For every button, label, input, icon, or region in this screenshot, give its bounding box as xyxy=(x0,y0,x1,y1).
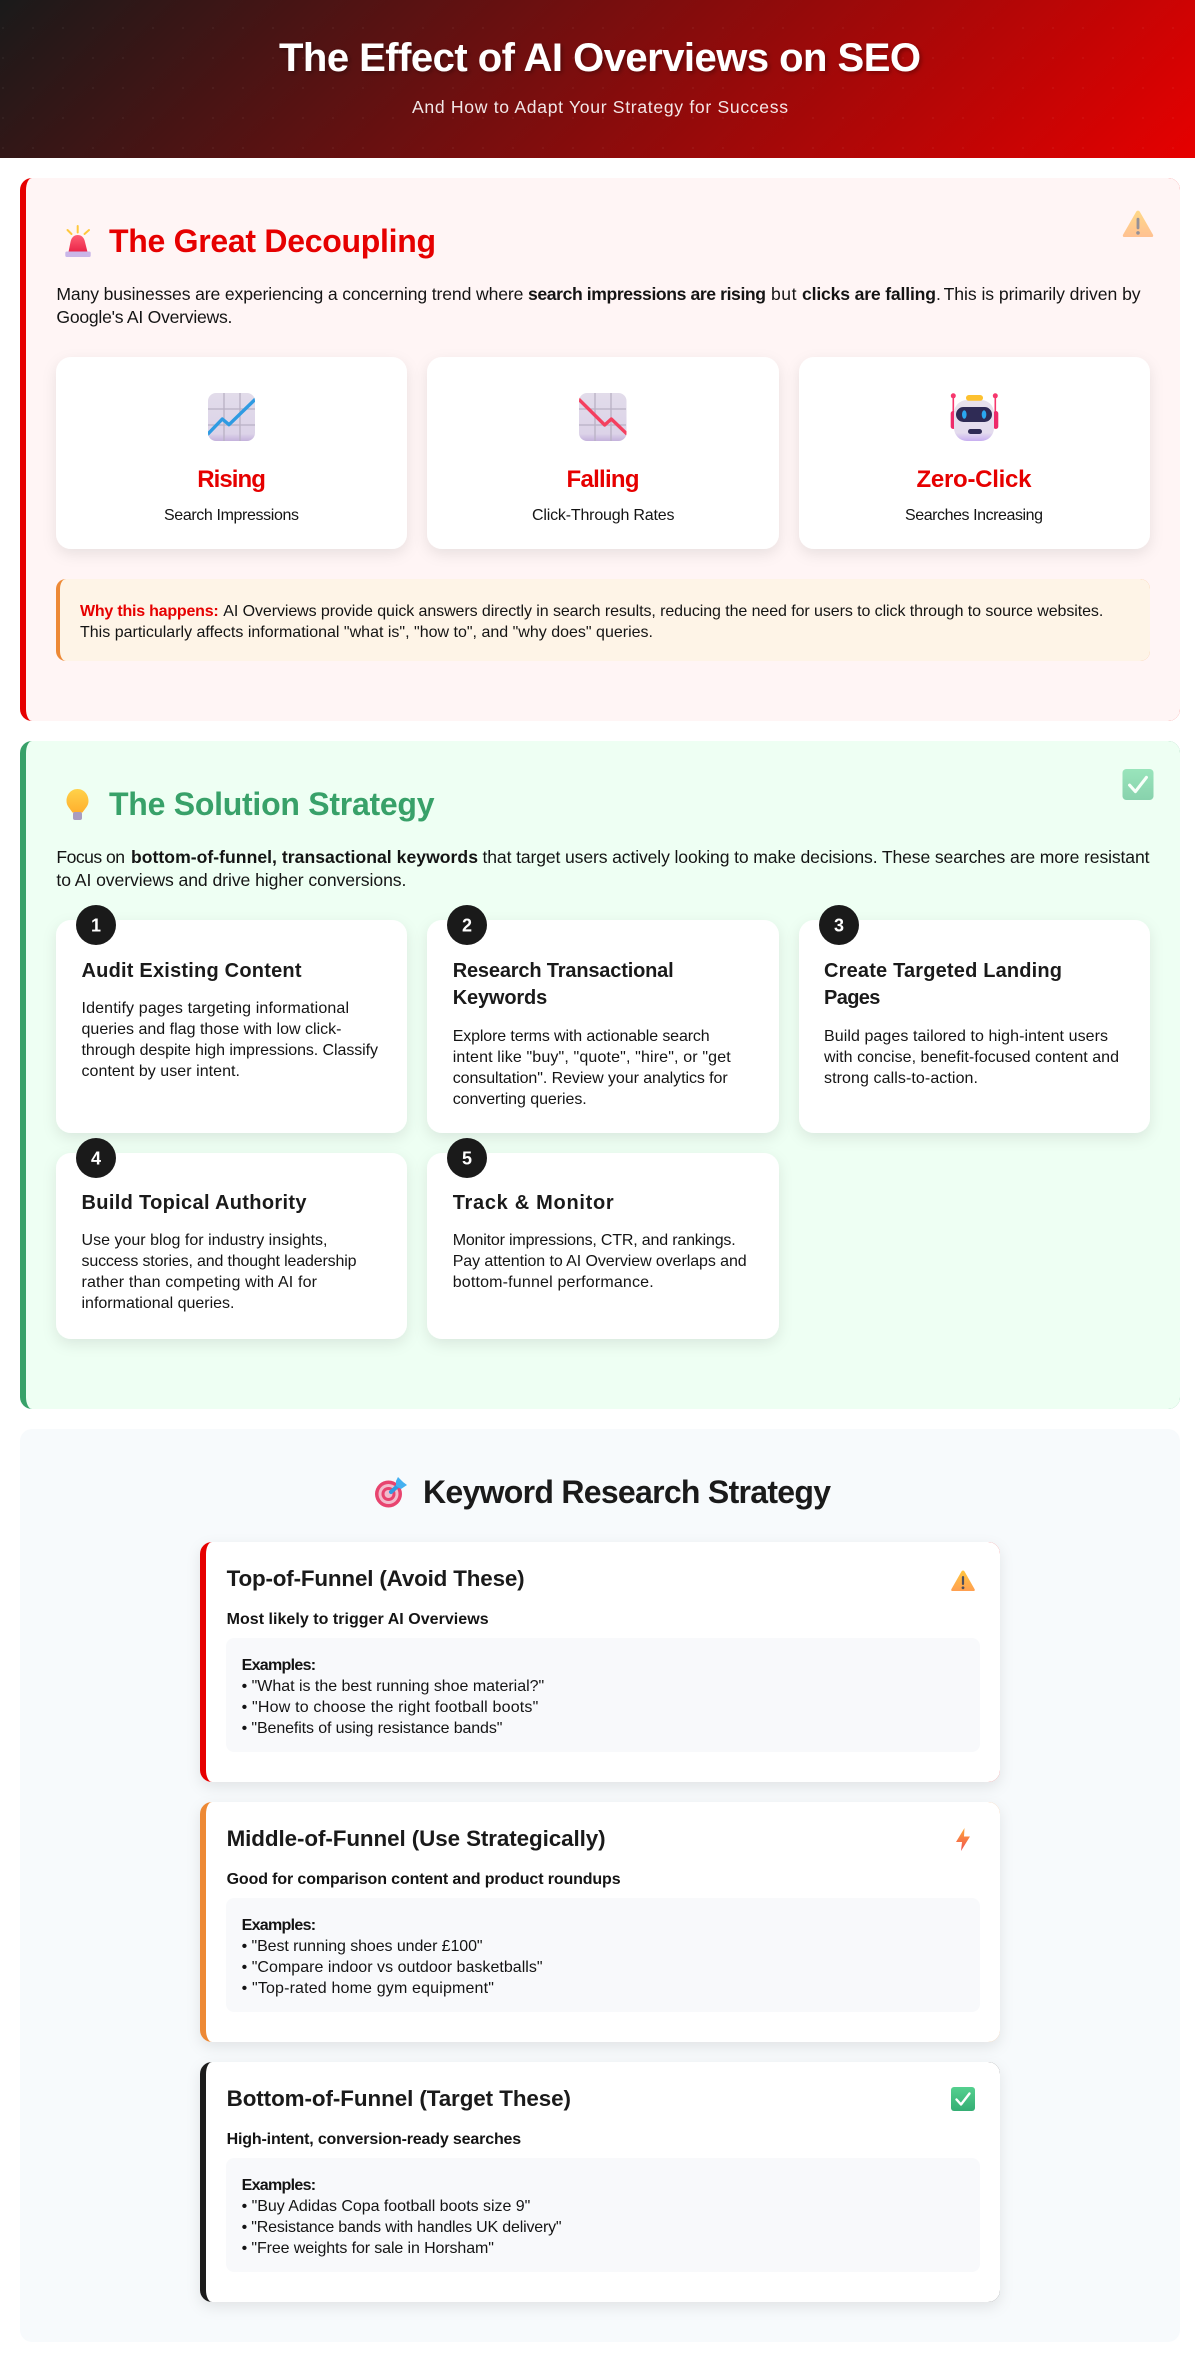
stat label: Search Impressions xyxy=(164,507,299,524)
examples box: • "What is the best running shoe material?" xyxy=(242,1678,544,1695)
step card 2: converting queries. xyxy=(453,1091,587,1108)
intro text: This is primarily driven by xyxy=(944,284,1141,304)
icon: check mark xyxy=(951,2087,975,2111)
subtitle: And How to Adapt Your Strategy for Success xyxy=(412,97,788,117)
step card 3: Pages xyxy=(824,987,880,1009)
funnel card: bottom: Bottom-of-Funnel (Target These) xyxy=(227,2086,571,2111)
intro text: but xyxy=(771,284,797,304)
step card 1: Audit Existing Content xyxy=(82,960,302,982)
panel: the great decoupling xyxy=(20,178,1180,721)
examples box: • "Free weights for sale in Horsham" xyxy=(242,2240,494,2257)
step card 3: Create Targeted Landing xyxy=(824,960,1062,982)
funnel card: bottom: High-intent, conversion-ready searches xyxy=(227,2131,521,2148)
step card 5: Pay attention to AI Overview overlaps and xyxy=(453,1253,747,1270)
stat card: falling xyxy=(427,357,779,549)
examples box: • "Compare indoor vs outdoor basketballs" xyxy=(242,1959,543,1976)
examples box: Examples: xyxy=(242,1917,316,1934)
examples box: • "Best running shoes under £100" xyxy=(242,1938,483,1955)
callout: why this happens: This particularly affects informational "what is", "how to", and "why does" queries. xyxy=(80,624,653,641)
intro text: Focus on xyxy=(56,847,125,867)
stat label: Click-Through Rates xyxy=(532,507,674,524)
step card 2: Research Transactional xyxy=(453,960,674,982)
intro text xyxy=(56,847,1150,890)
examples box xyxy=(226,1898,980,2012)
step card 1: 1 xyxy=(91,916,101,936)
step card 1: Identify pages targeting informational xyxy=(82,1000,349,1017)
stat value: Falling xyxy=(566,466,640,493)
icon: chart falling xyxy=(578,393,628,441)
step card 1: queries and flag those with low click- xyxy=(82,1021,342,1038)
stat card: zero-click xyxy=(799,357,1150,549)
stat card: rising xyxy=(56,357,407,549)
step card 3 xyxy=(799,905,1150,1133)
stat value: Rising xyxy=(197,466,266,493)
intro text: to AI overviews and drive higher conversions. xyxy=(56,870,406,890)
step card 1: through despite high impressions. Classify xyxy=(82,1042,378,1059)
examples box: • "Benefits of using resistance bands" xyxy=(242,1720,502,1737)
intro text: Many businesses are experiencing a concerning trend where xyxy=(56,284,523,304)
examples box: Examples: xyxy=(242,2177,316,2194)
header banner xyxy=(0,0,1195,158)
funnel card: top: Most likely to trigger AI Overviews xyxy=(227,1611,489,1628)
icon: chart rising xyxy=(207,393,256,441)
step card 3: 3 xyxy=(834,916,844,936)
step card 4: Use your blog for industry insights, xyxy=(82,1232,328,1249)
icon: target xyxy=(375,1477,407,1508)
step card 1: content by user intent. xyxy=(82,1063,240,1080)
icon: check watermark xyxy=(1122,769,1154,800)
examples box: • "Top-rated home gym equipment" xyxy=(242,1980,494,1997)
panel: the solution strategy xyxy=(20,741,1180,1409)
funnel card: middle: Good for comparison content and product roundups xyxy=(227,1871,621,1888)
examples box: • "Buy Adidas Copa football boots size 9" xyxy=(242,2198,530,2215)
icon: robot xyxy=(951,393,998,441)
intro text xyxy=(56,284,1141,327)
title: The Effect of AI Overviews on SEO xyxy=(279,36,921,80)
icon: warning xyxy=(951,1570,975,1591)
step card 4: 4 xyxy=(91,1148,101,1168)
intro text: bottom-of-funnel, transactional keywords xyxy=(131,847,478,867)
step card 2: 2 xyxy=(462,916,472,936)
step card 1 xyxy=(56,905,407,1133)
heading: Keyword Research Strategy xyxy=(423,1474,831,1510)
funnel card: middle: Middle-of-Funnel (Use Strategically) xyxy=(227,1826,606,1851)
step card 4 xyxy=(56,1138,407,1339)
step card 3: with concise, benefit-focused content and xyxy=(823,1049,1119,1066)
icon: siren xyxy=(65,226,91,257)
step card 3: strong calls-to-action. xyxy=(824,1070,978,1087)
step card 5: Monitor impressions, CTR, and rankings. xyxy=(453,1232,736,1249)
step card 3: Build pages tailored to high-intent users xyxy=(824,1028,1108,1045)
stat value: Zero-Click xyxy=(916,466,1032,493)
examples box: Examples: xyxy=(242,1657,316,1674)
icon: lightning bolt xyxy=(956,1828,970,1851)
step card 5: bottom-funnel performance. xyxy=(453,1274,654,1291)
step card 2: Explore terms with actionable search xyxy=(453,1028,710,1045)
step card 5: 5 xyxy=(462,1148,472,1168)
step card 5: Track & Monitor xyxy=(453,1192,614,1214)
examples box: • "How to choose the right football boots" xyxy=(242,1699,538,1716)
heading: The Great Decoupling xyxy=(109,223,436,259)
examples box xyxy=(226,2158,980,2272)
funnel card: top xyxy=(200,1542,1000,1782)
intro text: Google's AI Overviews. xyxy=(56,307,232,327)
funnel card: middle xyxy=(200,1802,1000,2042)
callout: why this happens xyxy=(56,579,1150,661)
step card 2: consultation". Review your analytics for xyxy=(453,1070,728,1087)
examples box xyxy=(226,1638,980,1752)
icon: warning watermark xyxy=(1123,211,1153,237)
callout: why this happens: AI Overviews provide quick answers directly in search results, reducing the need for users to click through to source websites. xyxy=(223,603,1103,620)
icon: light bulb xyxy=(66,789,88,820)
step card 4: rather than competing with AI for xyxy=(82,1274,318,1291)
intro text: clicks are falling xyxy=(802,284,936,304)
heading: The Solution Strategy xyxy=(109,786,435,822)
examples box: • "Resistance bands with handles UK delivery" xyxy=(242,2219,562,2236)
step card 2: Keywords xyxy=(453,987,547,1009)
step card 4: Build Topical Authority xyxy=(82,1192,307,1214)
intro text: . xyxy=(936,284,941,304)
step card 5 xyxy=(427,1138,779,1339)
step card 4: informational queries. xyxy=(82,1295,234,1312)
step card 4: success stories, and thought leadership xyxy=(82,1253,357,1270)
step card 2: intent like "buy", "quote", "hire", or "get xyxy=(453,1049,731,1066)
callout: why this happens: Why this happens: xyxy=(80,603,219,620)
funnel card: top: Top-of-Funnel (Avoid These) xyxy=(227,1566,525,1591)
stat label: Searches Increasing xyxy=(905,507,1043,524)
intro text: search impressions are rising xyxy=(528,284,766,304)
panel: keyword research strategy xyxy=(20,1429,1180,2342)
funnel card: bottom xyxy=(200,2062,1000,2302)
step card 2 xyxy=(427,905,779,1133)
intro text: that target users actively looking to make decisions. These searches are more resistant xyxy=(482,847,1150,867)
